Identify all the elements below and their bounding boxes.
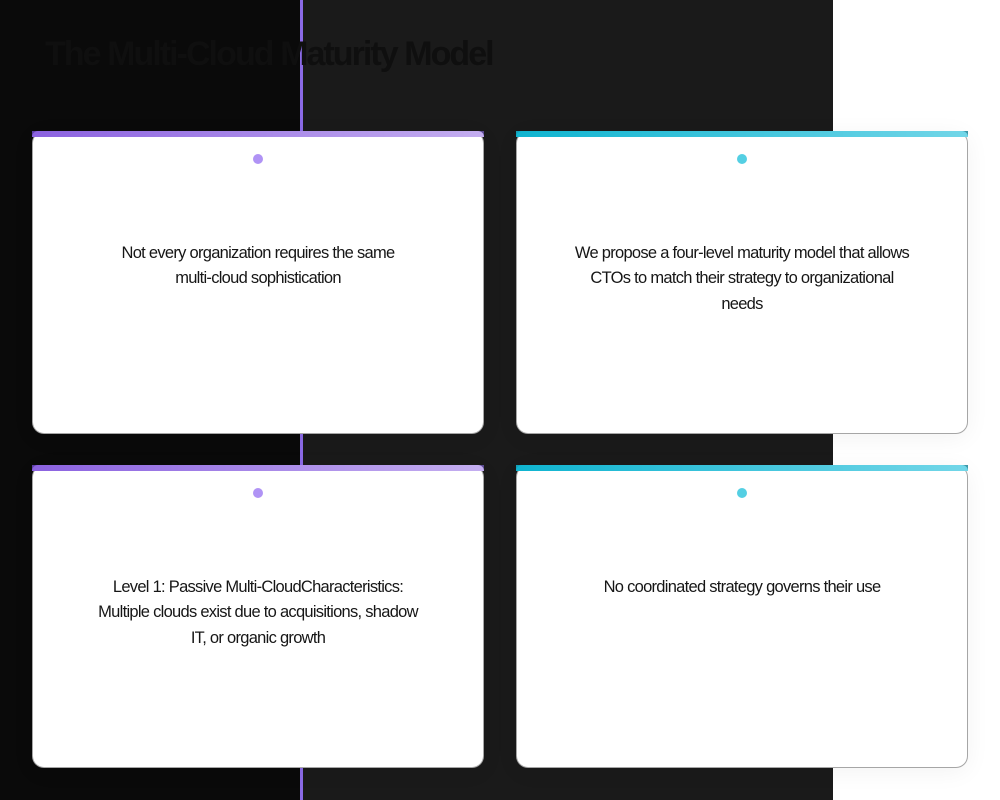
- panel: card 4: [516, 465, 968, 768]
- text: card 2: CTOs to match their strategy to organizational: [590, 269, 894, 287]
- icon: cyan dot: [737, 154, 747, 164]
- darker left background panel: [0, 0, 300, 800]
- text: card 4: No coordinated strategy governs their use: [604, 578, 880, 596]
- text: card 2: [575, 244, 910, 313]
- text: card 3: Level 1: Passive Multi-CloudCharacteristics:: [113, 578, 403, 596]
- text: card 3: IT, or organic growth: [191, 629, 325, 647]
- text: card 1: Not every organization requires the same: [122, 244, 394, 262]
- title: The Multi-Cloud Maturity Model: [45, 35, 493, 73]
- text: card 3: Multiple clouds exist due to acquisitions, shadow: [98, 603, 418, 621]
- text: card 1: [122, 244, 394, 287]
- icon: purple dot: [253, 488, 263, 498]
- icon: purple dot: [253, 154, 263, 164]
- text: card 2: We propose a four-level maturity model that allows: [575, 244, 909, 262]
- vertical purple accent line: [300, 0, 303, 800]
- text: card 3: [98, 578, 419, 647]
- text: card 2: needs: [721, 295, 763, 313]
- icon: cyan dot: [737, 488, 747, 498]
- text: card 1: multi-cloud sophistication: [175, 269, 341, 287]
- panel: card 2: [516, 131, 968, 434]
- panel: card 3: [32, 465, 484, 768]
- panel: card 1: [32, 131, 484, 434]
